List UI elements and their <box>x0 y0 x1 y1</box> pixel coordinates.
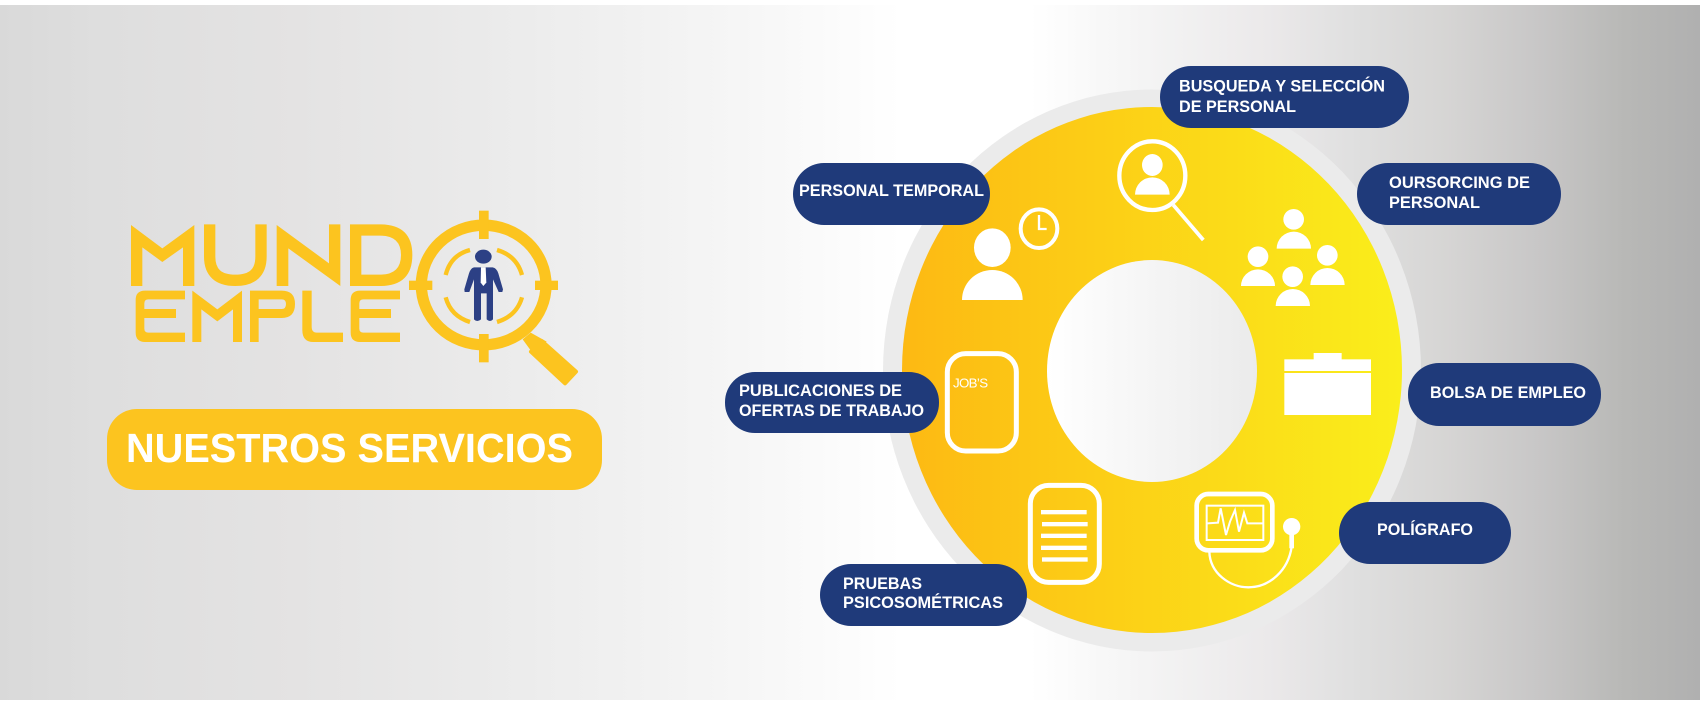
pill: bolsa de empleo: BOLSA DE EMPLEO <box>1430 383 1586 402</box>
pill: oursorcing de personal: OURSORCING DE <box>1389 173 1530 192</box>
pill: bolsa de empleo <box>1408 363 1601 426</box>
icon: clock <box>1021 209 1057 248</box>
pill: publicaciones de ofertas: OFERTAS DE TRABAJO <box>739 401 924 420</box>
pill: oursorcing de personal: PERSONAL <box>1389 193 1480 212</box>
pill: busqueda y seleccion: BUSQUEDA Y SELECCIÓN <box>1179 76 1385 96</box>
pill: pruebas psicosometricas: PRUEBAS <box>843 574 922 593</box>
icons upper half <box>962 141 1345 306</box>
heading button <box>107 409 602 490</box>
icons lower half <box>947 353 1371 587</box>
pill: publicaciones de ofertas <box>725 372 939 433</box>
icon: polygraph <box>1197 494 1300 587</box>
logo word: MUND <box>131 224 412 286</box>
icon: test document <box>1030 485 1099 582</box>
pill: pruebas psicosometricas <box>820 564 1027 626</box>
logo word: EMPLE <box>136 291 400 342</box>
icon: briefcase <box>1284 353 1371 415</box>
logo icon: person in suit <box>464 250 503 321</box>
icon: job posting: JOB’S <box>953 375 988 390</box>
icon: staff group <box>1241 209 1345 306</box>
logo icon: magnifier target <box>409 211 576 383</box>
logo: Mundo Empleo <box>131 211 576 383</box>
pill: personal temporal: PERSONAL TEMPORAL <box>799 181 984 200</box>
pill: poligrafo <box>1339 502 1511 564</box>
icon: job posting <box>947 354 1016 451</box>
service wheel <box>883 90 1421 652</box>
icon: temporary worker <box>962 228 1023 300</box>
pill: poligrafo: POLÍGRAFO <box>1377 520 1473 539</box>
heading button: NUESTROS SERVICIOS <box>126 425 573 471</box>
icon: search person <box>1119 141 1203 240</box>
pill: busqueda y seleccion: DE PERSONAL <box>1179 97 1296 116</box>
pill: oursorcing de personal <box>1357 163 1561 225</box>
pill: publicaciones de ofertas: PUBLICACIONES DE <box>739 381 902 400</box>
pill: pruebas psicosometricas: PSICOSOMÉTRICAS <box>843 593 1003 612</box>
pill: personal temporal <box>793 163 990 225</box>
pill: busqueda y seleccion <box>1160 66 1409 128</box>
